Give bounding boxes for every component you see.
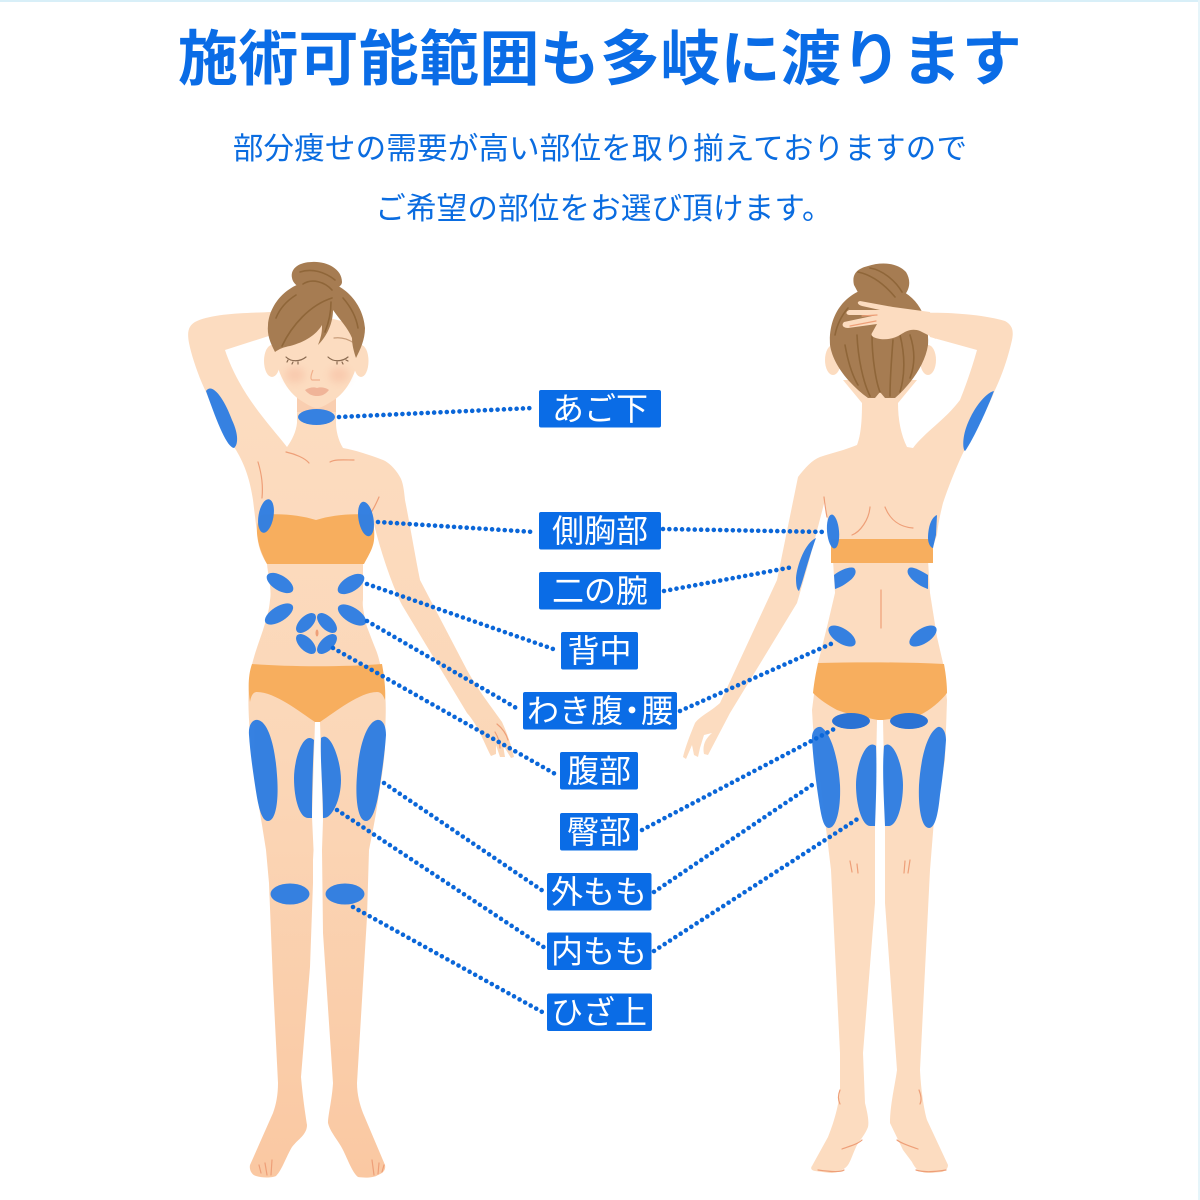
back briefs [813, 662, 947, 720]
zone: under chin [298, 409, 335, 425]
dotted leader lines [333, 408, 859, 1013]
label: 側胸部: 側胸部 [552, 513, 648, 549]
front briefs [249, 664, 385, 722]
front neck shadow [297, 396, 336, 412]
zone: waist [825, 621, 940, 651]
zone: back side chest left [826, 514, 841, 549]
front toes [259, 724, 508, 1175]
zone: upper arm [796, 538, 816, 591]
back hair strands [835, 268, 914, 396]
front mouth [305, 387, 329, 396]
zone: side chest right [356, 500, 376, 538]
zone: back side chest right [928, 515, 937, 548]
back body [683, 313, 1013, 1173]
back bra strap [831, 539, 933, 563]
label: 腹部: 腹部 [567, 753, 631, 789]
front hair [268, 280, 365, 358]
front eyes and brow [286, 338, 354, 364]
back ears [825, 345, 936, 375]
zone: flank left [261, 599, 297, 629]
front ears [264, 345, 368, 377]
zone: inner thighs [294, 737, 341, 818]
zone: back upper left [263, 569, 297, 597]
figure: back view woman [683, 264, 1013, 1173]
zone: outer thighs [249, 720, 386, 821]
label: 内もも: 内もも [551, 934, 647, 970]
zone: buttocks [832, 713, 928, 729]
zone: back upper [834, 567, 928, 589]
target zones: back [796, 391, 994, 828]
zone: outer thighs [812, 727, 946, 828]
front nose [311, 370, 320, 380]
front hair strands [276, 270, 358, 346]
label: あご下: あご下 [552, 391, 648, 427]
zone: back upper right [334, 570, 368, 598]
front face [274, 318, 360, 408]
back hand on head [843, 301, 936, 339]
front body [188, 312, 514, 1178]
subtitle text: 部分痩せの需要が高い部位を取り揃えておりますので [233, 132, 967, 166]
label: わき腹・腰: わき腹・腰 [527, 693, 673, 729]
zone: abdomen [293, 610, 340, 657]
subtitle text [233, 132, 967, 226]
zone: side chest left [256, 498, 276, 534]
front blush [285, 367, 349, 383]
back hand lines [850, 315, 877, 326]
label: 二の腕: 二の腕 [552, 573, 648, 609]
figure: front view woman [188, 262, 514, 1178]
front armpit and collarbone lines [258, 452, 379, 514]
zone: flank right [334, 600, 370, 630]
zone: upper arm [206, 388, 237, 448]
subtitle text: ご希望の部位をお選び頂けます。 [375, 192, 833, 226]
target zones: front [206, 388, 386, 905]
label: 外もも: 外もも [551, 874, 647, 910]
zone: above knees [270, 884, 364, 904]
back hair bun [853, 264, 909, 302]
back hair [830, 286, 928, 398]
title: 施術可能範囲も多岐に渡ります [178, 26, 1022, 93]
zone: back upper arm raised [963, 391, 994, 451]
zone: inner thighs [856, 745, 903, 826]
back shoulder lines [818, 497, 946, 1172]
front navel [316, 630, 318, 636]
label: 背中: 背中 [567, 633, 632, 669]
label: 臀部: 臀部 [567, 814, 631, 850]
front bra [257, 514, 374, 564]
label: ひざ上: ひざ上 [551, 994, 647, 1030]
front hair bun [292, 262, 342, 291]
